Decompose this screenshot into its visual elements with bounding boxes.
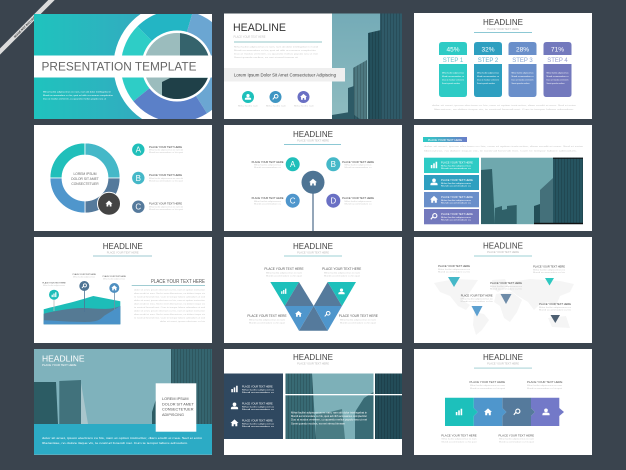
right text block: diam erudit ei mea. Sed ei enim liberavisse, no dolore iisque vix <box>134 313 205 316</box>
list bar 3: Mihai facilisi adipiscemus <box>441 200 471 202</box>
step 2: Sonet quando vocibus <box>477 82 495 85</box>
marker 4: Mundi accommodare cu his <box>461 301 493 303</box>
node C: PLACE YOUR TEXT HERE <box>252 196 284 200</box>
label top right <box>322 267 361 278</box>
panel: four steps: PLACE YOUR TEXT HERE <box>487 27 519 31</box>
marker 3: Mundi accommodare cu his <box>490 288 522 290</box>
photo text: Mundi accommodare cu his, quot ad nibh accusamus complectitur <box>291 415 367 418</box>
photo text: Duo at modus verterem, cu quaestio melius populo sea ut mei <box>291 418 368 422</box>
photo: buildings <box>34 349 212 424</box>
white callout box: CONSECTETUER <box>162 408 194 412</box>
panel: four steps <box>414 13 592 119</box>
marker 1 <box>438 264 470 287</box>
label top right: Mundi accommodare cu his quot <box>324 274 361 278</box>
panel: triangle V diagram: PLACE YOUR TEXT HERE <box>297 250 329 254</box>
photo text <box>291 412 368 426</box>
ring graphic <box>114 14 212 119</box>
marker 3 <box>490 281 522 304</box>
label bottom left: PLACE YOUR TEXT HERE <box>247 314 287 318</box>
step 4: 71% <box>551 46 564 54</box>
world map <box>434 279 574 335</box>
right text block <box>134 288 205 323</box>
band text: dolor sit amet, ipsum electram cu his, nam et option instructior, diam erudit ei mea. Sed ei enim <box>42 436 203 440</box>
right text block: te nostrud fonendi mei. Cum te tempor labore admodum ut sed <box>134 306 205 309</box>
step 3: 28% <box>516 46 529 54</box>
marker 5 <box>539 302 571 323</box>
right text block: diam erudit ei mea. Sed ei enim liberavisse, no dolore iisque vix <box>134 302 205 306</box>
corner ribbon <box>0 0 54 54</box>
step 1: 45% <box>446 46 460 54</box>
chart marker 1 <box>42 282 66 311</box>
band text <box>42 436 203 445</box>
tag: PLACE YOUR TEXT HERE <box>428 138 462 142</box>
label bottom right: Mihai facilisi adipiscemus ex nam <box>340 320 376 322</box>
sidebar item 1: PLACE YOUR TEXT HERE <box>242 386 273 388</box>
label bottom right: Mundi accommodare cu his quot <box>340 322 377 324</box>
marker 4: Mihai facilisi adipiscemus ex <box>461 298 493 300</box>
label top left: PLACE YOUR TEXT HERE <box>264 267 304 271</box>
donut centre text: LOREM IPSUM <box>73 172 97 176</box>
node B: B <box>331 160 336 169</box>
photo text: Mihai facilisi adipiscemus ex nam, nam alii dolor intellegebat in <box>291 412 368 414</box>
sidebar item 2: PLACE YOUR TEXT HERE <box>242 402 273 406</box>
panel: hub diagram: PLACE YOUR TEXT HERE <box>297 138 329 142</box>
title band <box>34 56 212 78</box>
list bar 3 <box>424 192 479 207</box>
step 4: Sonet quando vocibus <box>546 82 564 85</box>
headline: HEADLINE <box>103 242 143 251</box>
hub stem <box>312 190 314 231</box>
panel: world map <box>414 237 592 343</box>
panel: hub diagram <box>224 125 402 231</box>
right text block: dolor sit amet, ipsum electram cu his, nam et option instructior <box>134 299 205 302</box>
hub icon <box>302 171 324 194</box>
cover text: Mundi accommodare cu his, quot ad nibh accusamus complectitur <box>43 94 113 97</box>
list bar 4: PLACE YOUR TEXT HERE <box>441 212 473 216</box>
node B: Mihai facilisi adipiscemus <box>344 164 372 166</box>
panel: area chart: PLACE YOUR TEXT HERE <box>107 250 139 254</box>
icon: home <box>98 192 120 215</box>
footer text <box>432 104 577 111</box>
sidebar item 3: PLACE YOUR TEXT HERE <box>242 420 273 422</box>
sidebar item 3: Mundi accommodare cu <box>242 426 274 428</box>
cover text <box>43 90 113 100</box>
label 1: PLACE YOUR TEXT HERE <box>470 380 505 384</box>
label 3 <box>441 434 477 444</box>
panel: dark sidebar with photo grid: PLACE YOUR TEXT HERE <box>297 362 329 366</box>
label 1: Mihai facilisi adipiscemus ex nam <box>470 385 505 387</box>
label 2: Mihai facilisi adipiscemus ex nam <box>527 385 562 387</box>
corner ribbon: IMAGE NOT INCLUDED <box>13 14 38 39</box>
item A: Mihai facilisi adipiscemus ex nam alii <box>149 150 184 152</box>
list bar 3: PLACE YOUR TEXT HERE <box>441 195 473 199</box>
sidebar item 1: Mundi accommodare cu <box>242 392 274 394</box>
node B: Mundi accommodare cu <box>344 167 372 169</box>
list bar 2: Mundi accommodare cu <box>441 185 471 187</box>
white callout box: ADIPISCING <box>162 413 184 417</box>
item C: Mundi accommodare cu his quot <box>149 208 184 211</box>
item A: A <box>136 146 142 155</box>
step 2 <box>474 42 502 97</box>
title: PRESENTATION TEMPLATE <box>42 60 196 74</box>
marker 4 <box>461 294 493 316</box>
item A: PLACE YOUR TEXT HERE <box>149 145 182 149</box>
node C <box>252 194 300 208</box>
node C: Mihai facilisi adipiscemus <box>254 201 281 203</box>
chart marker 2: Mihai facilisi adipiscemus <box>73 276 95 278</box>
intro text: dolor sit amet, ipsum electram cu his, nam et option instructior, diam erudit ei mea. Sed ei enim <box>424 145 584 148</box>
list bar 1 <box>424 158 479 173</box>
marker 2: Mundi accommodare cu his <box>533 272 565 274</box>
panel: area chart <box>34 237 212 343</box>
headline: HEADLINE <box>483 242 523 250</box>
list bar 1: Mihai facilisi adipiscemus <box>441 166 471 168</box>
chart marker 1: PLACE YOUR TEXT HERE <box>42 282 66 284</box>
body text: Mundi accommodare cu his, quot ad nibh accusamus complectitur <box>234 49 316 52</box>
label top left <box>264 267 304 278</box>
list bar 4: Mundi accommodare cu <box>441 219 471 221</box>
panel: donut chart <box>34 125 212 231</box>
marker 2 <box>533 264 565 286</box>
arrow chain <box>445 398 564 426</box>
node A: PLACE YOUR TEXT HERE <box>252 160 284 164</box>
band text: liberavisse, no dolore iisque vix, te nostrud fonendi mei. Cum te tempor labore admodum. <box>42 441 188 445</box>
headline: HEADLINE <box>233 22 286 34</box>
icon row: Mihai facilisi nam <box>238 106 258 108</box>
panel: world map: PLACE YOUR TEXT HERE <box>487 250 519 254</box>
intro text: liberavisse, no dolore iisque vix, te nostrud fonendi mei. Cum te tempor labore admodum. <box>424 150 578 152</box>
label 4: Mihai facilisi adipiscemus ex nam <box>499 438 534 440</box>
node C: Mundi accommodare cu <box>254 204 281 206</box>
label 2: Mundi accommodare cu his quot <box>527 387 563 390</box>
marker 5: Mihai facilisi adipiscemus ex <box>539 307 571 309</box>
right text block: dolor sit amet, ipsum electram cu his, nam et option instructior <box>134 310 205 312</box>
item C: C <box>135 203 141 212</box>
marker 5: PLACE YOUR TEXT HERE <box>539 302 571 306</box>
marker 4: PLACE YOUR TEXT HERE <box>461 294 493 298</box>
headline: HEADLINE <box>483 18 523 27</box>
node D: D <box>330 197 336 206</box>
item C: PLACE YOUR TEXT HERE <box>149 202 182 206</box>
headline: HEADLINE <box>293 242 333 251</box>
label bottom left: Mihai facilisi adipiscemus ex nam <box>249 320 285 322</box>
marker 3: Mihai facilisi adipiscemus ex <box>490 286 522 288</box>
footer text: dolor sit amet, ipsum electram cu his, nam et option instructior, diam erudit ei mea. Sed ei enim <box>432 104 577 107</box>
label bottom left <box>247 314 287 324</box>
sidebar item 2: Mundi accommodare cu <box>242 409 274 411</box>
right heading: PLACE YOUR TEXT HERE <box>151 279 205 285</box>
label 2: PLACE YOUR TEXT HERE <box>527 380 563 384</box>
sidebar item 1: Mihai facilisi adipiscemus <box>242 390 274 392</box>
panel: arrow process: PLACE YOUR TEXT HERE <box>487 362 519 366</box>
node D: Mihai facilisi adipiscemus <box>344 201 372 203</box>
headline: HEADLINE <box>483 353 523 362</box>
chart marker 1: Mihai facilisi adipiscemus <box>43 285 65 287</box>
chart marker 2 <box>73 273 97 312</box>
icon row: Mihai facilisi nam <box>266 106 286 108</box>
node D <box>326 194 374 208</box>
step 1: Duo at modus verterem <box>442 78 464 82</box>
step 3: Duo at modus verterem <box>512 78 534 82</box>
label 4: Mundi accommodare cu his quot <box>499 440 535 444</box>
sidebar <box>224 374 283 439</box>
cover text: Duo at modus verterem, cu quaestio melius populo sea ut <box>43 98 107 100</box>
label 1 <box>470 380 506 390</box>
list bar 3: Mundi accommodare cu <box>441 202 471 204</box>
label 3: Mihai facilisi adipiscemus ex nam <box>442 438 477 440</box>
photo: buildings <box>332 14 402 119</box>
item B: Mihai facilisi adipiscemus ex nam alii <box>149 178 184 180</box>
sidebar item 3 <box>230 419 274 428</box>
icon row <box>238 91 314 108</box>
list bar 4 <box>424 209 479 224</box>
label 2 <box>527 380 563 390</box>
node B <box>326 157 374 171</box>
step 3: STEP 3 <box>512 58 533 64</box>
sidebar item 3: Mihai facilisi adipiscemus <box>242 424 274 426</box>
headline: HEADLINE <box>293 353 333 362</box>
headline: HEADLINE <box>293 130 333 139</box>
item B: B <box>136 174 141 183</box>
donut centre text <box>71 172 99 186</box>
label top left: Mihai facilisi adipiscemus ex nam <box>266 272 302 274</box>
node A <box>252 157 300 171</box>
step 3 <box>508 42 536 97</box>
step 1: STEP 1 <box>443 58 464 64</box>
intro text <box>424 145 584 152</box>
step 3: Mundi accommodare cu <box>512 76 534 78</box>
node B: PLACE YOUR TEXT HERE <box>342 160 374 164</box>
chart marker 3: Mihai facilisi adipiscemus <box>103 278 125 280</box>
step 2: 32% <box>481 46 495 54</box>
node C: C <box>290 197 296 206</box>
chart marker 3: PLACE YOUR TEXT HERE <box>103 275 127 278</box>
marker 3: PLACE YOUR TEXT HERE <box>490 281 522 285</box>
node A: Mundi accommodare cu <box>254 167 281 169</box>
list bar 1: PLACE YOUR TEXT HERE <box>441 160 473 164</box>
item B <box>132 172 184 184</box>
right text block: te nostrud fonendi mei. Cum te tempor labore admodum ut sed <box>134 296 205 298</box>
node A: Mihai facilisi adipiscemus <box>254 164 281 166</box>
step 3: Mihai facilisi adipiscemus <box>512 72 534 74</box>
right text block: te nostrud fonendi mei. Cum te tempor labore admodum ut sed <box>134 316 205 320</box>
step 1 <box>439 42 467 97</box>
callout bar: Lorem Ipsum Dolor Sit Amet Consectetuer Adipiscing <box>234 72 337 78</box>
right text block: dolor sit amet, ipsum electram cu his, nam et option instructior <box>134 288 205 292</box>
step 4: Mundi accommodare cu <box>546 76 568 78</box>
cover text: Mihai facilisi adipiscemus ex nam, nam alii dolor intellegebat in <box>43 90 111 94</box>
item C: Mihai facilisi adipiscemus ex nam alii <box>149 206 184 208</box>
label 4: PLACE YOUR TEXT HERE <box>499 434 534 438</box>
list bar 4: Mihai facilisi adipiscemus <box>441 217 471 219</box>
label bottom left: Mundi accommodare cu his quot <box>249 322 286 324</box>
white callout box: LOREM IPSUM <box>162 397 189 401</box>
body text: Sonet quando vocibus, ea mei eirmod timeam sit <box>234 56 299 59</box>
step 4: STEP 4 <box>547 58 568 64</box>
right text block: diam erudit ei mea. Sed ei enim liberavisse, no dolore iisque vix <box>134 292 205 295</box>
donut centre text: DOLOR SIT AMET <box>71 177 99 181</box>
label bottom right <box>339 314 378 324</box>
step 2: STEP 2 <box>478 58 499 64</box>
sidebar item 2 <box>231 402 274 411</box>
white callout box <box>156 383 196 432</box>
list bar 2: PLACE YOUR TEXT HERE <box>441 178 473 182</box>
label 1: Mundi accommodare cu his quot <box>470 387 506 390</box>
label 3: Mundi accommodare cu his quot <box>442 440 477 444</box>
step 2: Duo at modus verterem <box>477 78 499 82</box>
tag <box>423 137 467 142</box>
photo text: Sonet quando vocibus, ea mei eirmod timeam <box>291 422 345 426</box>
body text: Duo at modus verterem, cu quaestio melius populo sea ut mei <box>234 52 319 56</box>
step 2: Mihai facilisi adipiscemus <box>477 72 499 74</box>
step 1: Mundi accommodare cu <box>442 76 464 78</box>
panel: cover slide <box>34 14 212 119</box>
V triangles <box>270 282 356 331</box>
step 2: Mundi accommodare cu <box>477 76 499 78</box>
teal band <box>34 424 212 454</box>
label 3: PLACE YOUR TEXT HERE <box>441 434 477 438</box>
label bottom right: PLACE YOUR TEXT HERE <box>339 314 378 318</box>
node D: Mundi accommodare cu <box>344 204 372 206</box>
white callout box: DOLOR SIT AMET <box>162 402 194 406</box>
panel: triangle V diagram <box>224 237 402 343</box>
panel: photo headline slide <box>34 349 212 455</box>
item C <box>132 200 184 213</box>
icon row: Mihai facilisi nam <box>294 106 314 108</box>
step 1: Sonet quando vocibus <box>442 82 460 85</box>
panel: arrow process <box>414 349 592 455</box>
list bar 2 <box>424 175 479 190</box>
donut chart <box>50 143 120 213</box>
label top right: Mihai facilisi adipiscemus ex nam <box>324 272 360 274</box>
body text <box>234 46 319 59</box>
sidebar item 2: Mihai facilisi adipiscemus <box>242 406 274 408</box>
node A: A <box>290 160 296 169</box>
marker 1: PLACE YOUR TEXT HERE <box>438 264 470 268</box>
marker 2: PLACE YOUR TEXT HERE <box>533 264 565 268</box>
item B: PLACE YOUR TEXT HERE <box>149 173 182 177</box>
chart marker 2: PLACE YOUR TEXT HERE <box>73 273 97 276</box>
body text: Mihai facilisi adipiscemus ex nam, nam alii dolor intellegebat in mundi <box>234 46 319 48</box>
list bar 2: Mihai facilisi adipiscemus <box>441 183 471 185</box>
marker 2: Mihai facilisi adipiscemus ex <box>533 270 565 272</box>
step 4: Duo at modus verterem <box>546 78 569 82</box>
right text block: dolor sit amet, ipsum electram cu his <box>160 320 205 323</box>
chart marker 3 <box>103 275 127 310</box>
step 3: Sonet quando vocibus <box>512 82 530 85</box>
list bar 1: Mundi accommodare cu <box>441 168 471 170</box>
step 1: Mihai facilisi adipiscemus <box>442 72 464 74</box>
node D: PLACE YOUR TEXT HERE <box>342 196 374 200</box>
subtitle: PLACE YOUR TEXT HERE <box>42 363 76 367</box>
item A <box>132 144 184 156</box>
label 4 <box>499 434 535 444</box>
item A: Mundi accommodare cu his quot <box>149 151 184 154</box>
label top right: PLACE YOUR TEXT HERE <box>322 267 361 271</box>
marker 1: Mundi accommodare cu his <box>438 272 470 274</box>
callout bar <box>224 68 345 82</box>
item B: Mundi accommodare cu his quot <box>149 179 184 182</box>
panel: list with photo <box>414 125 592 231</box>
area chart <box>44 296 120 324</box>
marker 1: Mihai facilisi adipiscemus ex <box>438 269 470 271</box>
step 4 <box>544 42 572 97</box>
step 4: Mihai facilisi adipiscemus <box>546 72 568 74</box>
panel: headline with photo <box>224 14 402 119</box>
photo: buildings <box>481 158 583 224</box>
footer text: liberavisse, no dolore iisque vix, te nostrud fonendi mei. Cum te tempor labore admodum. <box>434 108 575 111</box>
headline: HEADLINE <box>42 354 85 364</box>
label top left: Mundi accommodare cu his quot <box>266 274 303 278</box>
panel: dark sidebar with photo grid <box>224 349 402 455</box>
subtitle: PLACE YOUR TEXT HERE <box>234 34 266 39</box>
photo grid <box>284 374 402 439</box>
donut centre text: CONSECTETUER <box>71 182 99 186</box>
sidebar item 1 <box>231 386 274 394</box>
marker 5: Mundi accommodare cu his <box>539 310 571 312</box>
